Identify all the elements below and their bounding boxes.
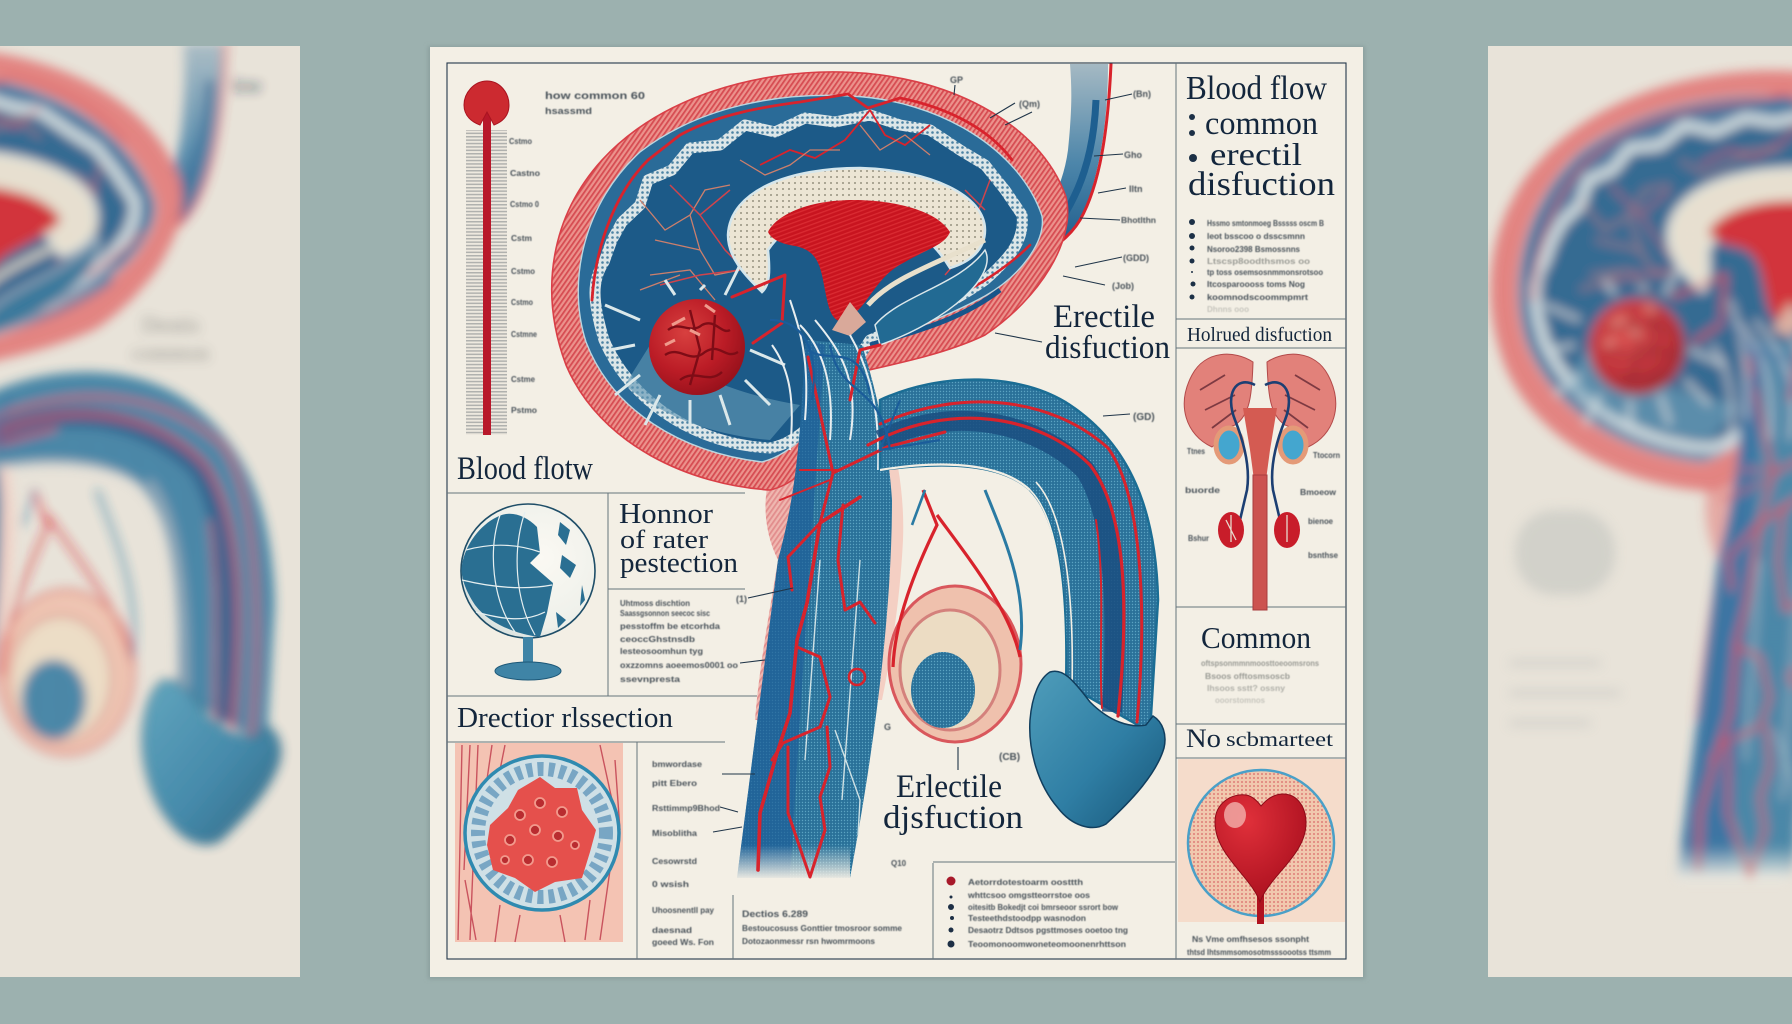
text block: title bullet list: Ltscsp8oodthsmos oo [1207,257,1310,266]
title block: common [1205,106,1318,142]
text block: bottom bullet list: whttcsoo omgstteorrstoe oos [967,891,1091,900]
pink sleeve left strip [755,440,810,720]
scale labels: Castno [510,169,540,178]
heading: erectile dysfunction center: Erlectile [896,769,1002,805]
heading: erectile dysfunction right: disfuction [1045,330,1170,366]
scale labels: Pstmo [511,406,537,415]
text block: bottom bullet list: Aetorrdotestoarm oosttth [968,878,1083,887]
text block: honor list: Uhtmoss dischtion [620,599,690,608]
panel: honor heading: pestection [620,548,738,579]
red artery along dome [592,94,1030,345]
main poster sheet [430,47,1363,977]
tissue background [455,743,623,942]
heading: erectile dysfunction right [1045,299,1170,366]
text block: honor list: oxzzomns aoeemos0001 oo [620,661,738,670]
organ diagram labels: Ttnes [1187,447,1205,456]
tissue labels: Cesowrstd [652,857,697,866]
title block: disfuction [1188,166,1335,203]
pink outer ring [552,72,1068,490]
text block: honor list [620,599,738,684]
organ diagram labels: bienoe [1308,517,1334,526]
poster shadow [428,46,1365,979]
tissue labels [652,760,720,947]
scale labels: Cstmo 0 [510,200,540,209]
title block: Blood flow [1186,70,1327,107]
tissue labels: daesnad [652,926,692,935]
top-left caption: hsassmd [545,106,592,116]
heading: direction dissection: Drectior rlssection [457,703,673,734]
central body [1243,408,1277,480]
stand [523,637,533,668]
scale labels: Cstmo [511,267,535,276]
upper tube behind dome [1012,64,1111,262]
lobe folds [1200,375,1320,428]
right blue lobe [875,250,987,345]
scale labels: Cstme [511,375,536,384]
text block: title bullet list: leot bsscoo o dsscsmnn [1207,232,1305,241]
red column [483,110,491,435]
tissue labels: Uhoosnentll pay [652,906,715,915]
blue cap [1030,671,1165,827]
text block: heart caption: Ns Vme omfhsesos ssonpht [1192,935,1309,944]
organ diagram labels: Ttocorn [1313,451,1340,460]
tissue labels: Rsttimmp9Bhod [652,804,720,813]
text block: common: Bsoos offtosmsoscb [1205,672,1290,681]
text block: bottom bullet list [946,876,1128,949]
leader lines [713,85,1132,832]
text block: bottom bullet list: Testeethdstoodpp wasnodon [968,914,1086,923]
callout numbers: Iltn [1129,184,1142,194]
poster frame [447,63,1346,959]
callout numbers: (GD) [1133,412,1155,423]
blue glands [1216,428,1242,462]
heading: hormonal: Holrued disfuction [1187,324,1332,346]
text block: title bullet list: Itcosparoooss toms Nog [1207,280,1305,289]
junction fibres [772,300,878,470]
heart shape [1215,794,1306,902]
text block: common: oftspsonmmnmoosttoeoomsrons [1201,659,1320,668]
tissue labels: Misoblitha [652,829,698,838]
heading: no subcontent: No [1186,724,1221,753]
text block: title bullet list: Hssmo smtonmoeg Bsssss oscm B [1207,219,1324,228]
bulb [464,81,509,125]
title block [1186,70,1335,203]
text block: bottom caption: Dotozaonmessr rsn hwomrmoons [742,937,876,946]
arched tube [868,380,1158,732]
cell pores [501,798,579,867]
cream arch [728,168,985,292]
callout numbers: Bhotlthn [1121,216,1156,225]
heading: erectile dysfunction right: Erectile [1053,299,1155,335]
heart stem [1257,885,1264,924]
vertical shaft [737,340,892,880]
callout numbers [736,75,1156,868]
callout numbers: (Job) [1112,281,1134,291]
text block: bottom bullet list: Desaotrz Ddtsos pgsttmoses ooetoo tng [968,926,1128,935]
red ovals [1218,512,1244,548]
title block: erectil [1210,136,1302,172]
small organ diagram [1184,354,1336,610]
outer blue band [578,95,1042,462]
text block: title bullet list: Nsoroo2398 Bsmossnns [1207,245,1301,254]
text block: common: ooorstomnos [1215,696,1266,705]
text block: honor list: pesstoffm be etcorhda [620,622,721,631]
scale labels: Cstmne [511,330,537,339]
text block: bottom caption: Bestoucosuss Gonttier tmosroor somme [742,924,903,933]
continents [462,514,553,637]
callout numbers: (Qm) [1019,99,1040,109]
scale labels: Cstm [511,234,532,243]
tissue labels: bmwordase [652,760,703,769]
text block: title bullet list: Dhnns ooo [1207,305,1249,314]
grid lines [462,512,552,635]
heading: no subcontent [1186,724,1334,753]
text block: honor list: ceoccGhstnsdb [620,635,695,644]
organ diagram labels [1185,447,1340,560]
callout numbers: Gho [1124,150,1142,160]
panel: heart [1178,759,1345,924]
central stem [1253,475,1267,610]
organ diagram labels: Bshur [1188,534,1209,543]
peach background [1178,759,1345,922]
callout numbers: GP [950,75,963,85]
text block: bottom caption [742,909,903,946]
panel: blurred left poster copy: low [232,75,263,97]
text block: title bullet list [1189,219,1324,314]
organ diagram labels: Bmoeow [1300,488,1337,497]
red sphere [649,299,745,395]
left lobe [1184,354,1253,447]
heading: erectile dysfunction center [883,769,1023,836]
text block: honor list: ssevnpresta [620,675,681,684]
panel: globe [461,504,595,680]
heart highlight [1224,802,1246,828]
heading: no subcontent: scbmarteet [1226,729,1334,751]
text block: heart caption [1187,935,1331,957]
text block: title bullet list: koomnodscoommpmrt [1207,293,1308,302]
organ diagram labels: bsnthse [1308,551,1339,560]
right lobe [1267,354,1336,447]
blue body with lace edge [595,115,1022,448]
main anatomy illustration [552,64,1165,880]
red tissue core [487,777,596,892]
bullets [946,876,956,948]
text block: bottom bullet list: Teoomonoomwoneteomoonenrhttson [968,940,1126,949]
scale labels: Cstmo [511,298,533,307]
heading: erectile dysfunction center: djsfuction [883,800,1023,836]
ducts [1231,382,1289,520]
panel: blurred left poster copy [0,42,300,977]
pink sleeve right strip [872,400,903,700]
callout numbers: (1) [736,594,747,604]
text block: bottom bullet list: oitesitb Bokedjt coi bmrseoor ssrort bow [968,903,1119,912]
globe sphere [461,504,595,638]
lower oval organ [889,490,1022,742]
cream strip right of chamber [868,240,985,305]
lighter blue shading [625,345,800,440]
callout numbers: (GDD) [1123,253,1149,263]
lens circle [465,756,619,910]
scale labels [509,137,540,415]
panel: honor heading [619,499,738,579]
text block: common: Ihsoos sstt? ossny [1207,684,1286,693]
red vessels [732,275,945,877]
heart circle [1188,770,1334,916]
fine veins [640,125,990,300]
text block: honor list: Saassgsonnon seecoc sisc [620,609,710,618]
text block: honor list: lesteosoomhun tyg [620,647,703,656]
text block: title bullet list: tp toss osemsosnmmonsrotsoo [1207,268,1323,277]
panel: blurred right poster copy [1488,46,1792,977]
panel: blurred left poster copy: Dentis [142,312,199,337]
thermometer scale [464,81,540,435]
panel: honor heading: of rater [620,525,708,554]
small islands [556,522,585,628]
callout numbers: G [884,722,891,732]
top-left caption [545,91,646,116]
text block: heart caption: thtsd Ihtsmmsomosotmsssoootss ttsmm [1187,948,1331,957]
red chamber [768,200,950,322]
scale labels: Cstmo [509,137,532,146]
panel: tissue cross-section [455,743,623,942]
heading: blood flow left: Blood flotw [457,451,593,487]
callout numbers: (CB) [999,752,1020,763]
callout numbers: (Bn) [1133,89,1151,99]
top-left caption: how common 60 [545,91,646,102]
callout numbers: Q10 [891,859,907,868]
tissue labels: 0 wsish [652,880,689,889]
tissue labels: goeed Ws. Fon [652,938,714,947]
text block: common [1201,659,1320,705]
pale fibres around sphere [605,265,785,430]
scale bar [466,130,507,435]
panel: blurred left poster copy: common [132,340,209,365]
tan cone [832,302,866,336]
panel: honor heading: Honnor [619,499,714,530]
text block: bottom caption: Dectios 6.289 [742,909,808,919]
tissue labels: pitt Ebero [652,779,697,788]
heading: common: Common [1201,620,1311,655]
organ diagram labels: buorde [1185,486,1221,495]
